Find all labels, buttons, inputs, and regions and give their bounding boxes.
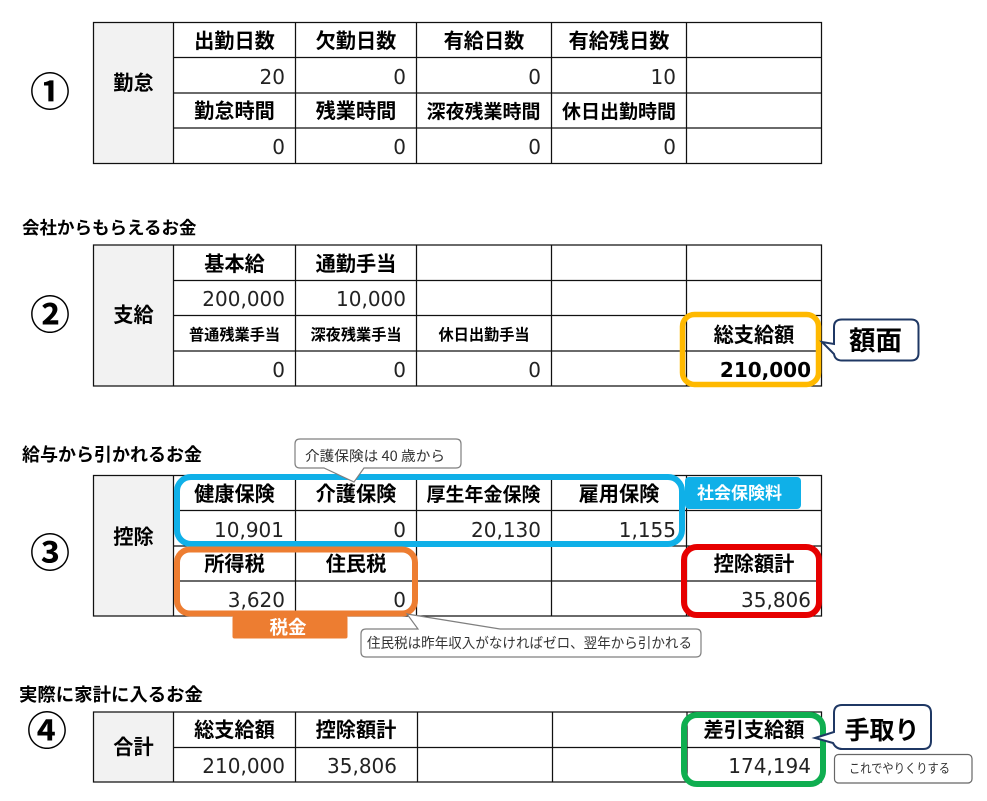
- section 3: deductions table: 0: [393, 518, 406, 542]
- section 2: payment table: 総支給額: [714, 319, 794, 348]
- section 4: total table: 差引支給額: [704, 714, 804, 743]
- section 4: total table: 控除額計: [316, 714, 396, 743]
- section 1: attendance table: 深夜残業時間: [426, 97, 541, 124]
- section 3: deductions table: 35,806: [741, 588, 811, 612]
- number marker 1: ①: [30, 60, 70, 118]
- section 1: attendance table: 10: [651, 65, 676, 89]
- section 1: attendance table: [94, 22, 822, 164]
- tag: tax: 税金: [269, 614, 307, 640]
- section 1: attendance table: 勤怠: [113, 67, 154, 96]
- section 2: payment table: 休日出勤手当: [438, 323, 530, 345]
- section 4: total table: 174,194: [728, 754, 811, 778]
- section 1: attendance table: 休日出勤時間: [562, 97, 676, 124]
- section 3: deductions table: 3,620: [228, 588, 285, 612]
- section 2: payment table: 通勤手当: [316, 248, 396, 277]
- section 2: payment table: 200,000: [202, 287, 285, 311]
- note: make do with this: [834, 754, 972, 783]
- section 2: payment table: [94, 245, 822, 386]
- section 3: deductions table: 住民税: [326, 548, 386, 577]
- callout: resident tax: 住民税は昨年収入がなければゼロ、翌年から引かれる: [367, 633, 692, 653]
- section 2: payment table: 0: [272, 358, 285, 382]
- highlight: social insurance: [177, 477, 682, 544]
- section 1: attendance table: 0: [528, 65, 541, 89]
- section 2: payment table: 0: [528, 358, 541, 382]
- section 3: deductions table: 10,901: [214, 518, 284, 542]
- callout: take-home: 手取り: [844, 711, 920, 747]
- heading: money from company: 会社からもらえるお金: [22, 215, 197, 240]
- section 3: deductions table: 厚生年金保険: [426, 480, 541, 507]
- section 3: deductions table: 控除: [113, 521, 154, 550]
- section 1: attendance table: 欠勤日数: [316, 25, 396, 54]
- section 3: deductions table: 20,130: [471, 518, 541, 542]
- section 1: attendance table: 0: [393, 135, 406, 159]
- section 1: attendance table: 有給残日数: [569, 25, 669, 54]
- section 4: total table: 35,806: [327, 754, 397, 778]
- section 4: total table: 総支給額: [194, 714, 275, 743]
- section 2: payment table: 10,000: [336, 287, 406, 311]
- section 2: payment table: 支給: [113, 299, 154, 328]
- section 3: deductions table: 雇用保険: [579, 478, 659, 507]
- callout: gross: 額面: [849, 319, 902, 358]
- callout: gross: [822, 319, 918, 360]
- section 3: deductions table: [94, 476, 822, 616]
- section 2: payment table: 普通残業手当: [189, 323, 280, 345]
- highlight: taxes: [177, 550, 415, 614]
- section 3: deductions table: 控除額計: [714, 548, 794, 577]
- section 1: attendance table: 出勤日数: [194, 25, 275, 54]
- section 4: total table: [94, 712, 822, 782]
- section 3: deductions table: 0: [393, 588, 406, 612]
- highlight: total deductions: [684, 547, 819, 615]
- callout: nursing care insurance: 介護保険は 40 歳から: [305, 446, 445, 466]
- section 1: attendance table: 勤怠時間: [194, 95, 275, 124]
- section 1: attendance table: 0: [528, 135, 541, 159]
- section 1: attendance table: 20: [260, 65, 285, 89]
- section 3: deductions table: 所得税: [204, 548, 265, 577]
- number marker 2: ②: [30, 283, 70, 341]
- section 2: payment table: 深夜残業手当: [310, 323, 402, 345]
- section 1: attendance table: 0: [272, 135, 285, 159]
- highlight: gross pay: [682, 314, 818, 384]
- callout: resident tax: [361, 614, 701, 657]
- callout: nursing care insurance: [295, 439, 461, 482]
- section 1: attendance table: 0: [393, 65, 406, 89]
- section 1: attendance table: 0: [663, 135, 676, 159]
- tag: tax: [232, 614, 348, 640]
- section 1: attendance table: 残業時間: [316, 95, 396, 124]
- section 3: deductions table: 1,155: [619, 518, 676, 542]
- heading: money deducted from salary: 給与から引かれるお金: [22, 441, 202, 467]
- section 3: deductions table: 健康保険: [194, 478, 275, 507]
- highlight: take-home pay: [684, 715, 823, 784]
- tag: social insurance: 社会保険料: [697, 479, 782, 504]
- heading: money into household: 実際に家計に入るお金: [19, 681, 204, 707]
- section 4: total table: 210,000: [202, 754, 285, 778]
- section 2: payment table: 210,000: [720, 358, 811, 382]
- number marker 3: ③: [30, 521, 70, 579]
- section 3: deductions table: 介護保険: [316, 478, 396, 507]
- section 1: attendance table: 有給日数: [444, 25, 524, 54]
- number marker 4: ④: [27, 699, 67, 757]
- tag: social insurance: [685, 477, 801, 509]
- section 2: payment table: 基本給: [204, 248, 265, 277]
- note: make do with this: これでやりくりする: [849, 758, 950, 777]
- section 2: payment table: 0: [393, 358, 406, 382]
- section 4: total table: 合計: [113, 731, 154, 760]
- callout: take-home: [815, 705, 931, 749]
